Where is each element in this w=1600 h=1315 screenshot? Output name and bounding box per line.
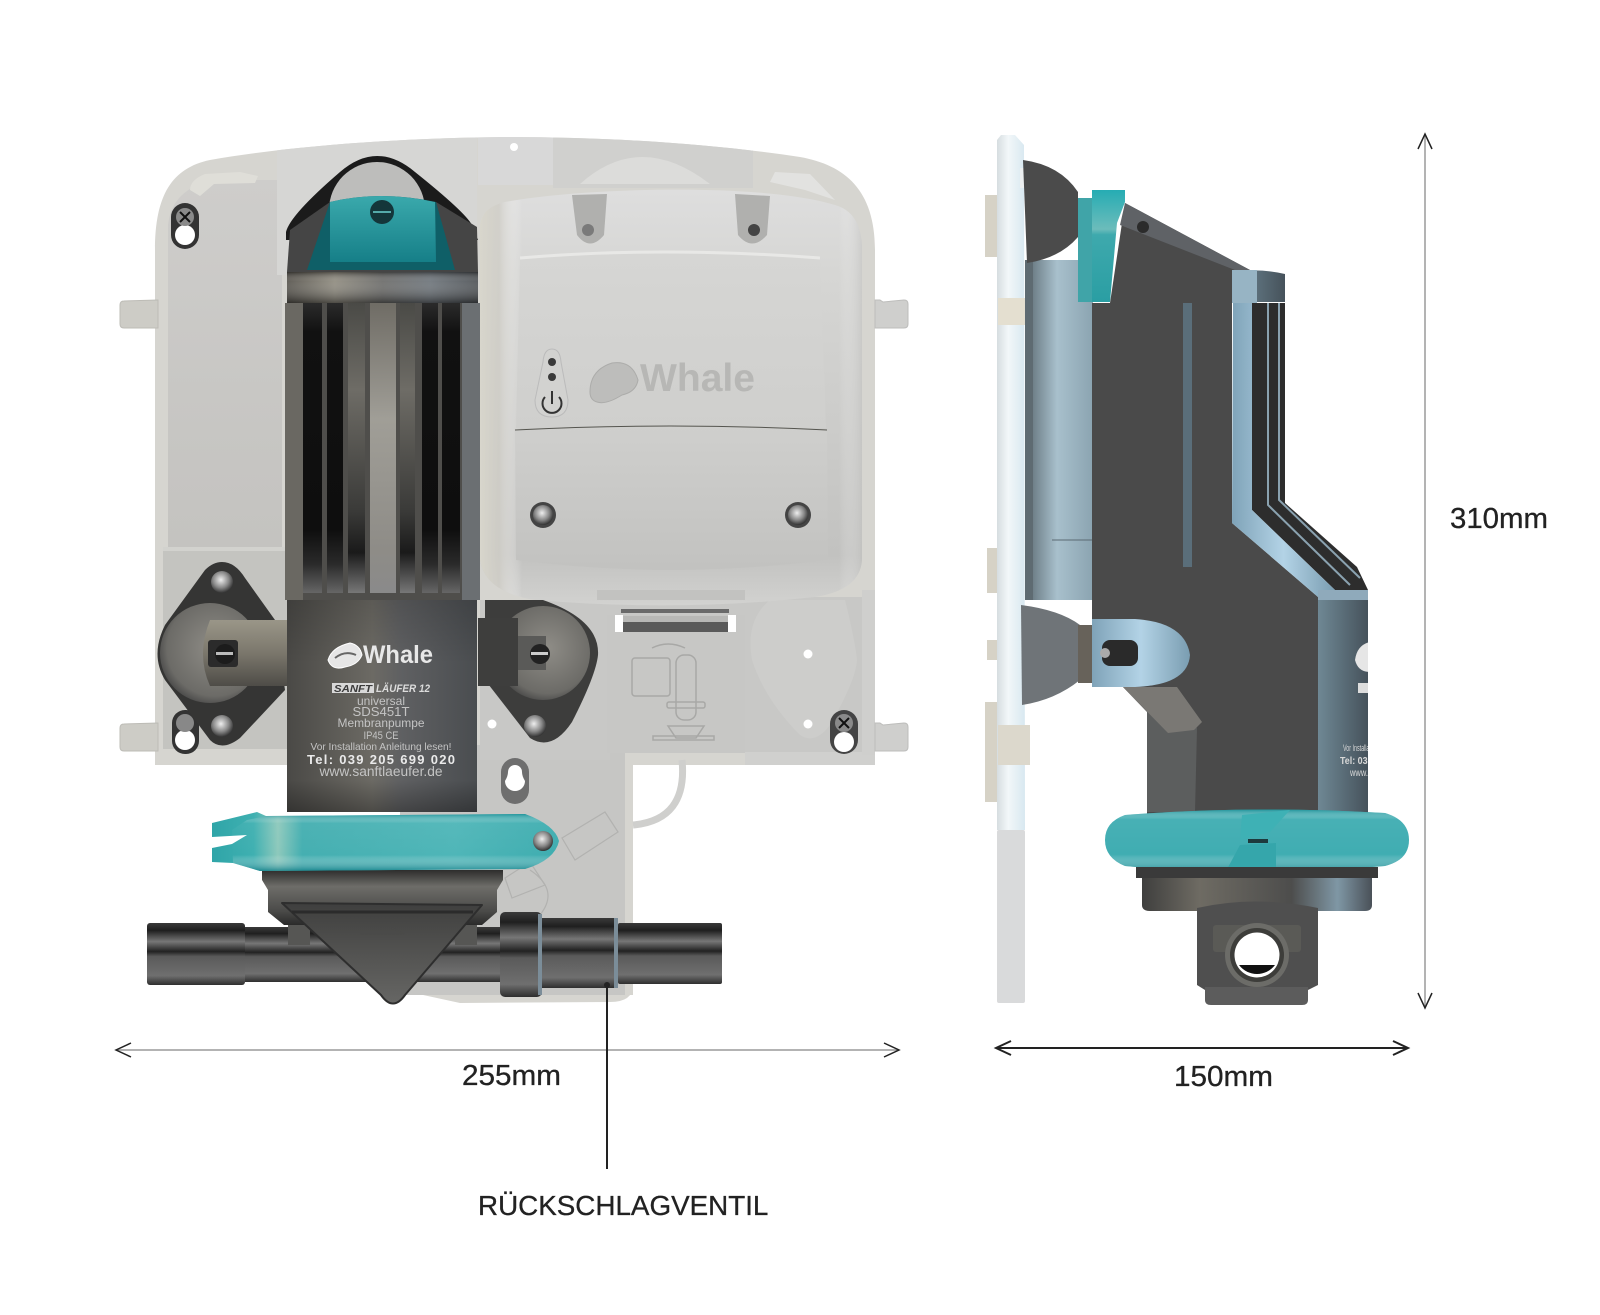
heat-sink fins — [285, 303, 480, 600]
mounting slots and holes — [171, 203, 858, 804]
Whale logo on motor — [328, 641, 433, 669]
side teal head — [1078, 190, 1125, 302]
check valve label: RÜCKSCHLAGVENTIL — [478, 1190, 768, 1221]
left motor mount — [158, 562, 287, 746]
Whale logo on motor: Whale — [363, 641, 433, 669]
height dimension 310mm: 310mm — [1450, 503, 1548, 535]
cable loop — [633, 760, 683, 825]
side cylinder with clipped label: www.san — [1349, 768, 1380, 779]
side cylinder with clipped label: Tel: 039 2 — [1340, 755, 1380, 767]
left mounting tabs — [120, 300, 158, 751]
triangular outlet — [282, 903, 482, 1004]
pump base under clamp — [262, 870, 503, 945]
product label text: universal — [357, 694, 405, 708]
right motor mount — [478, 600, 598, 742]
power indicator — [535, 349, 568, 417]
embossed hose outline on backplate — [505, 812, 618, 915]
side view of the pump unit — [985, 135, 1409, 1005]
depth dimension 150mm: 150mm — [1174, 1061, 1273, 1093]
side cable gland — [1092, 619, 1190, 687]
hinge panel with embossed install diagram — [607, 609, 745, 753]
backplate — [155, 130, 875, 1003]
wall plate side — [985, 135, 1036, 1003]
right mounting tabs — [875, 300, 908, 751]
control housing — [480, 190, 862, 605]
product label text — [307, 682, 455, 779]
side dark wedge — [1110, 203, 1250, 303]
product label text: Vor Installation Anleitung lesen! — [310, 742, 452, 753]
side cap — [1232, 270, 1285, 303]
depth dimension 150mm — [996, 1041, 1408, 1093]
side cylinder with clipped label: Vor Installation — [1343, 743, 1378, 753]
lower cover of housing — [515, 426, 828, 570]
leader line to check valve — [604, 982, 610, 1169]
screw recesses on housing top — [572, 194, 770, 244]
product label text: SDS451T — [352, 704, 410, 719]
side lower base — [1136, 867, 1378, 1005]
housing screws — [530, 502, 811, 528]
side outlet hole — [1225, 923, 1289, 987]
product label text: Membranpumpe — [338, 716, 425, 730]
teal clamp ring — [212, 812, 559, 871]
embossed Whale logo — [590, 357, 755, 403]
product label text: www.sanftlaeufer.de — [318, 764, 442, 779]
side housing — [1025, 260, 1093, 600]
height dimension 310mm — [1418, 134, 1548, 1008]
embossed Whale logo: Whale — [640, 357, 755, 400]
check-valve pipes — [147, 912, 722, 997]
side teal clamp ring — [1105, 809, 1409, 873]
product label text: IP45 CE — [364, 730, 398, 742]
side cooling ribs — [1232, 303, 1368, 598]
upper and lower side domes — [1021, 160, 1094, 705]
product label text: Tel: 039 205 699 020 — [307, 752, 455, 767]
width dimension 255mm: 255mm — [462, 1060, 561, 1092]
width dimension 255mm — [116, 1043, 899, 1092]
product label text: LÄUFER 12 — [376, 682, 430, 695]
motor body — [287, 600, 477, 812]
front view of the pump unit — [120, 130, 908, 1004]
side main block — [1092, 303, 1318, 815]
side cylinder with clipped label — [1318, 590, 1368, 812]
product label text: SANFT — [334, 684, 373, 695]
motor top with teal head — [277, 130, 478, 303]
